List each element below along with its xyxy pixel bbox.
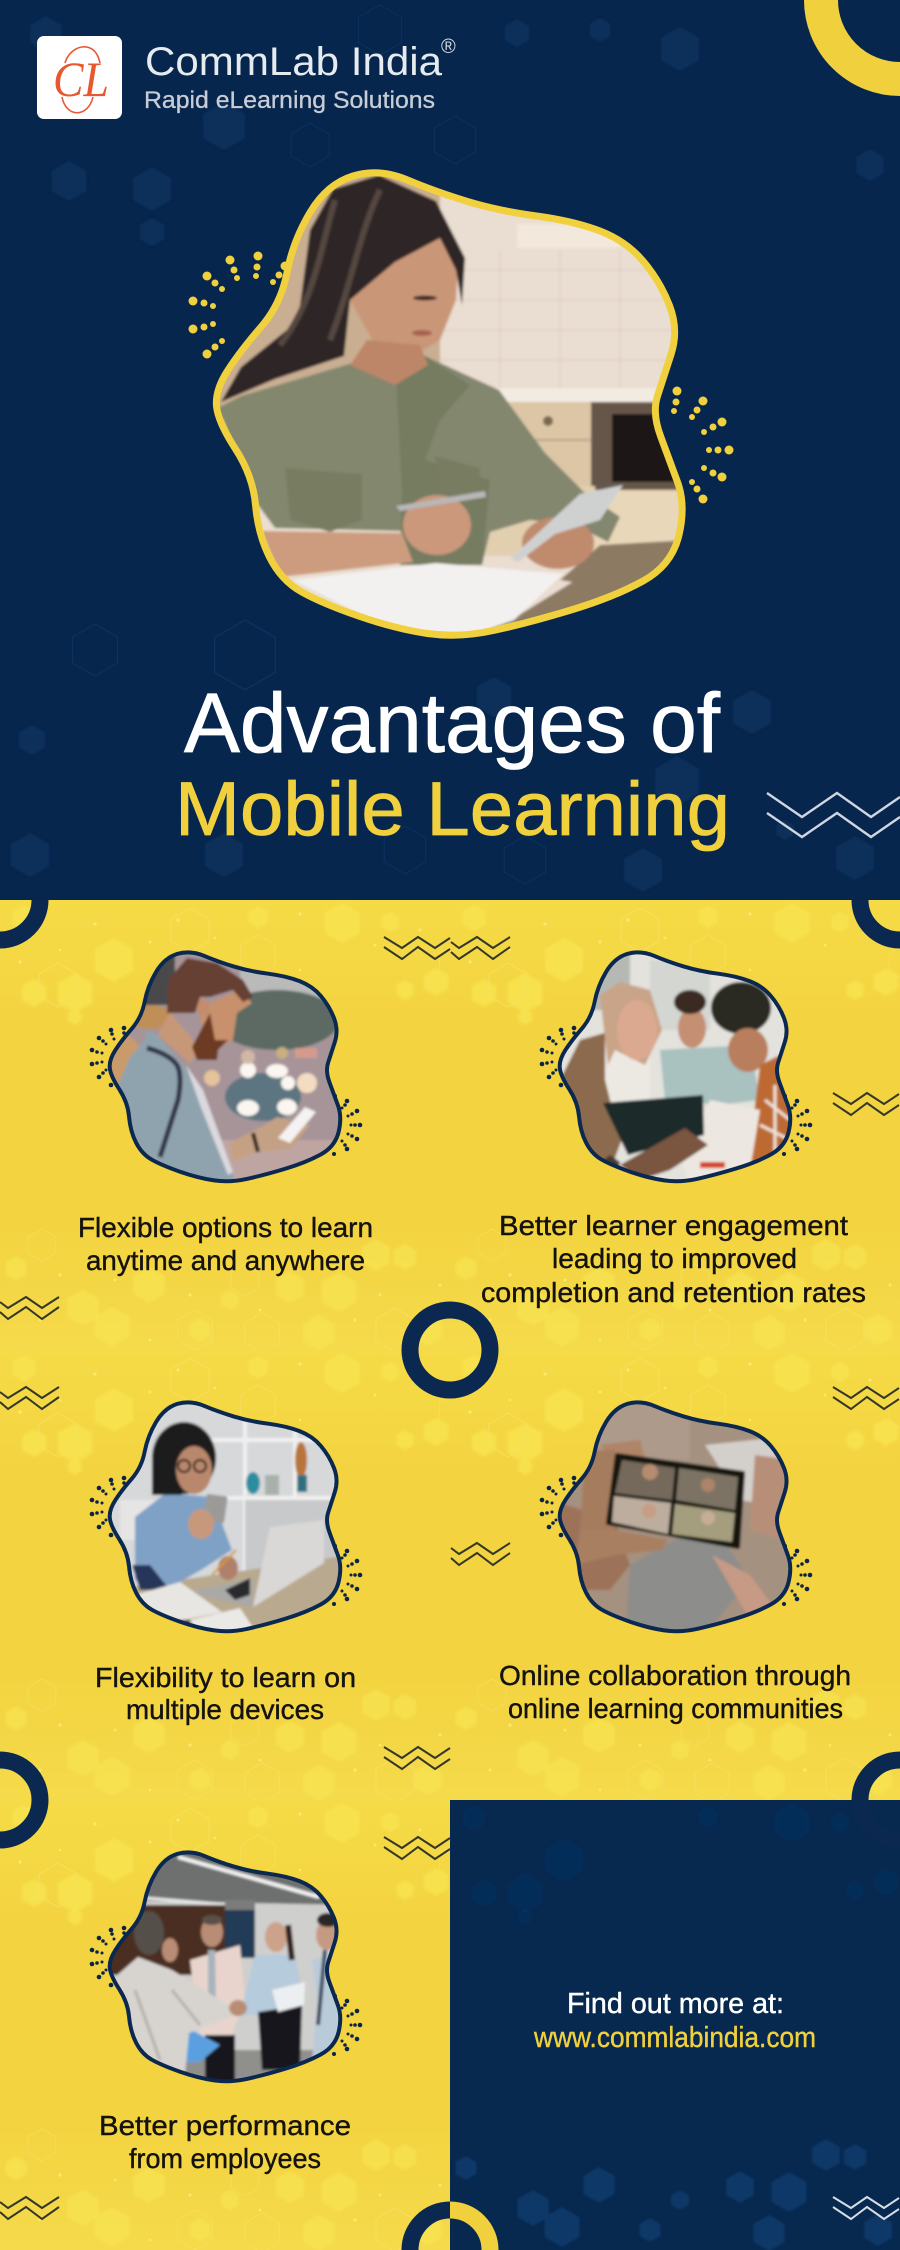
caption: leading to improved xyxy=(552,1243,797,1274)
caption xyxy=(481,1210,866,1308)
caption xyxy=(499,1660,851,1724)
ring decorations at tile corners xyxy=(0,860,900,1840)
caption xyxy=(99,2110,351,2174)
caption: Online collaboration through xyxy=(499,1660,851,1691)
decoration: top-right yellow ring xyxy=(821,0,900,79)
caption: from employees xyxy=(129,2143,321,2174)
ring: bottom centre, two-colour xyxy=(410,2210,490,2250)
panel: hero background xyxy=(0,0,900,900)
hero photo: woman with phone and notebook xyxy=(200,160,700,650)
photo: woman with phone and laptop xyxy=(108,1400,342,1634)
caption: completion and retention rates xyxy=(481,1277,866,1308)
photo: man with phone on street xyxy=(108,950,342,1184)
logo wordmark: CommLab India xyxy=(145,40,443,84)
panel background: navy call-to-action tile xyxy=(450,1800,900,2250)
panel: better performance xyxy=(90,1840,362,2174)
caption: multiple devices xyxy=(126,1694,324,1725)
caption xyxy=(78,1212,373,1276)
logo mark xyxy=(37,36,122,119)
photo: video call on phone xyxy=(558,1400,792,1634)
caption xyxy=(95,1662,356,1725)
zigzag accents on yellow tiles xyxy=(0,937,899,1859)
photo: colleagues shaking hands xyxy=(108,1850,342,2084)
website link: www.commlabindia.com xyxy=(533,2022,816,2054)
registered mark: ® xyxy=(441,36,456,58)
zigzag: hero white xyxy=(767,793,900,837)
caption: Better learner engagement xyxy=(499,1210,848,1241)
zigzag accent: bottom-left tile xyxy=(0,2197,59,2219)
panel: flexible options xyxy=(78,940,373,1276)
photo: group around a tablet xyxy=(558,950,792,1184)
call to action xyxy=(533,1988,816,2054)
zigzag accent on navy tile xyxy=(833,2197,899,2219)
title: Mobile Learning: Mobile Learning xyxy=(175,767,730,852)
panel backgrounds: yellow tiles xyxy=(0,900,900,2250)
title: Advantages of: Advantages of xyxy=(184,676,721,770)
panel: online collaboration xyxy=(499,1390,851,1724)
panel: multiple devices xyxy=(90,1390,362,1725)
logo mark: CL xyxy=(53,51,109,107)
caption: anytime and anywhere xyxy=(86,1245,365,1276)
caption: Better performance xyxy=(99,2110,351,2141)
panel: learner engagement xyxy=(481,940,866,1308)
dot spray: hero left xyxy=(188,252,290,358)
caption: Flexible options to learn xyxy=(78,1212,373,1243)
dot spray: hero right xyxy=(671,386,734,504)
call-to-action heading: Find out more at: xyxy=(567,1988,784,2020)
logo: CommLab India xyxy=(37,36,456,119)
logo tagline: Rapid eLearning Solutions xyxy=(144,87,435,114)
caption: Flexibility to learn on xyxy=(95,1662,356,1693)
caption: online learning communities xyxy=(508,1693,843,1724)
